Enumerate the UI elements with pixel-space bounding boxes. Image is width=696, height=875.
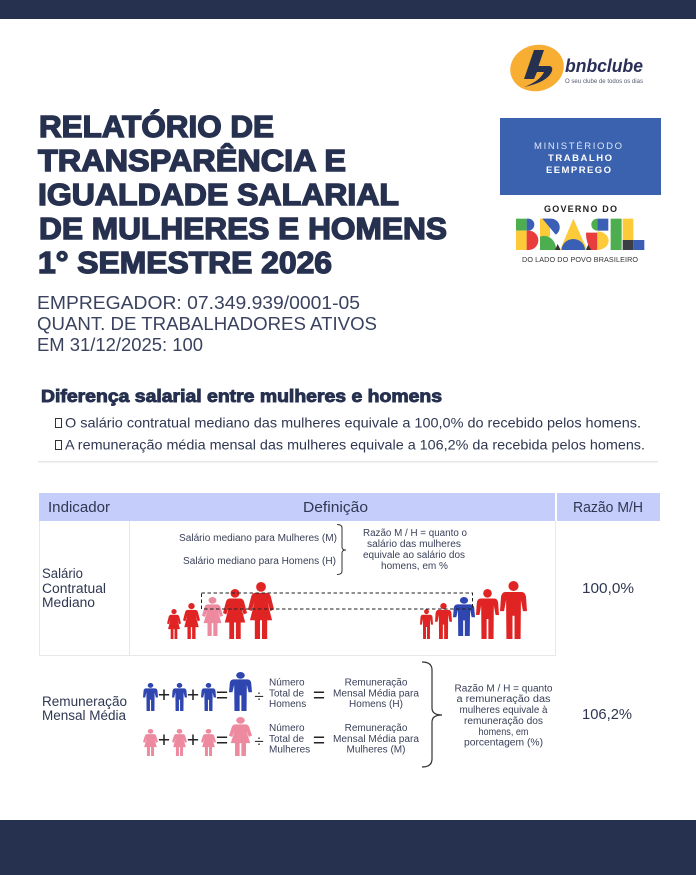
table header: Definição (303, 500, 368, 516)
title: 1° SEMESTRE 2026 (38, 246, 332, 280)
indicator name (42, 566, 106, 610)
indicator name: remuneração mensal média (42, 694, 127, 723)
employer details (37, 292, 377, 355)
title: RELATÓRIO DE (39, 108, 274, 144)
logo: governo do Brasil (516, 204, 644, 264)
ratio explanation: salário das mulheres (367, 539, 461, 550)
logo: bnb clube: bnbclube (565, 56, 643, 76)
salary difference bullets: O salário contratual mediano das mulheres equivale a 100,0% do recebido pelos homens. (65, 414, 641, 430)
title (38, 108, 447, 280)
equation: men: Homens (H) (349, 699, 403, 710)
equation: women: = (216, 729, 228, 752)
title: IGUALDADE SALARIAL (38, 178, 399, 212)
ministry badge (500, 118, 661, 195)
equation: men: Remuneração (345, 678, 408, 688)
brace (337, 524, 346, 574)
equation: women: Mulheres (269, 744, 310, 756)
section heading: Diferença salarial entre mulheres e homens (41, 386, 442, 406)
title: TRANSPARÊNCIA E (38, 142, 346, 178)
equation: men: + (158, 684, 170, 707)
equation: men: Total de (269, 688, 304, 700)
equation: men: ÷ (254, 687, 264, 706)
equation: women: Mulheres (M) (347, 744, 405, 756)
top bar (0, 0, 696, 19)
logo: bnb clube: O seu clube de todos os dias (565, 78, 643, 85)
bottom bar (0, 820, 696, 875)
equation: men: = (216, 684, 228, 707)
equation: women: ÷ (254, 732, 264, 751)
ratio explanation: equivale ao salário dos (363, 550, 465, 561)
employer details: QUANT. DE TRABALHADORES ATIVOS (37, 313, 377, 334)
ratio explanation: homens, em % (381, 561, 448, 572)
ratio explanation: remuneração: homens, em (478, 727, 528, 738)
indicator name: remuneração mensal média: Remuneração (42, 694, 127, 709)
equation: women: = (313, 729, 325, 752)
ministry badge: EEMPREGO (546, 165, 611, 176)
ratio explanation: remuneração: remuneração dos (464, 716, 543, 727)
median labels: Salário mediano para Homens (H) (183, 556, 336, 567)
men figures (420, 581, 527, 639)
table header (39, 493, 660, 521)
ratio explanation: remuneração: porcentagem (%) (464, 738, 543, 748)
title: DE MULHERES E HOMENS (39, 212, 447, 246)
table header: Razão M/H (573, 500, 643, 516)
table header: Indicador (48, 500, 110, 516)
equation: women: Total de (269, 734, 304, 745)
equation: men: Mensal Média para (333, 688, 419, 700)
ministry badge: TRABALHO (548, 153, 612, 164)
equation: women: Remuneração (345, 723, 408, 734)
large brace (422, 662, 442, 767)
equation: women: Mensal Média para (333, 734, 419, 745)
logo: bnb clube (505, 39, 643, 97)
ratio explanation: remuneração: a remuneração das (456, 694, 550, 705)
logo: governo do Brasil: DO LADO DO POVO BRASILEIRO (522, 255, 638, 264)
equation: men (143, 672, 419, 711)
employer details: EMPREGADOR: 07.349.939/0001-05 (37, 292, 360, 313)
salary difference bullets: A remuneração média mensal das mulheres equivale a 106,2% da recebida pelos homens. (65, 436, 645, 452)
equation: men: = (313, 684, 325, 707)
indicator name: Contratual (42, 581, 106, 596)
ratio explanation: remuneração: mulheres equivale à (460, 705, 548, 716)
ratio value: 100,0%: 100,0% (582, 580, 634, 597)
salary difference bullets (56, 414, 645, 452)
ratio explanation: remuneração (454, 684, 553, 748)
ratio value: 106,2%: 106,2% (582, 706, 632, 723)
indicator name: remuneração mensal média: Mensal Média (42, 708, 126, 723)
equation: men: Número (269, 678, 305, 688)
equation: men: + (187, 684, 199, 707)
ratio explanation: Razão M / H = quanto o (363, 528, 467, 539)
ratio explanation: remuneração: Razão M / H = quanto (454, 684, 553, 694)
equation: women: + (158, 729, 170, 752)
ratio explanation (363, 528, 467, 572)
median labels (179, 533, 337, 567)
table row: salário contratual mediano (40, 521, 556, 656)
median labels: Salário mediano para Mulheres (M) (179, 533, 337, 544)
logo: governo do Brasil: GOVERNO DO (544, 204, 617, 214)
equation: women: + (187, 729, 199, 752)
indicator name: Mediano (42, 595, 95, 610)
equation: men: Homens (269, 699, 306, 710)
women figures (167, 582, 274, 639)
equation: women (143, 717, 419, 756)
equation: women: Número (269, 723, 305, 734)
ministry badge: MINISTÉRIODO (534, 141, 622, 152)
indicator name: Salário (42, 566, 83, 581)
employer details: EM 31/12/2025: 100 (37, 334, 203, 355)
